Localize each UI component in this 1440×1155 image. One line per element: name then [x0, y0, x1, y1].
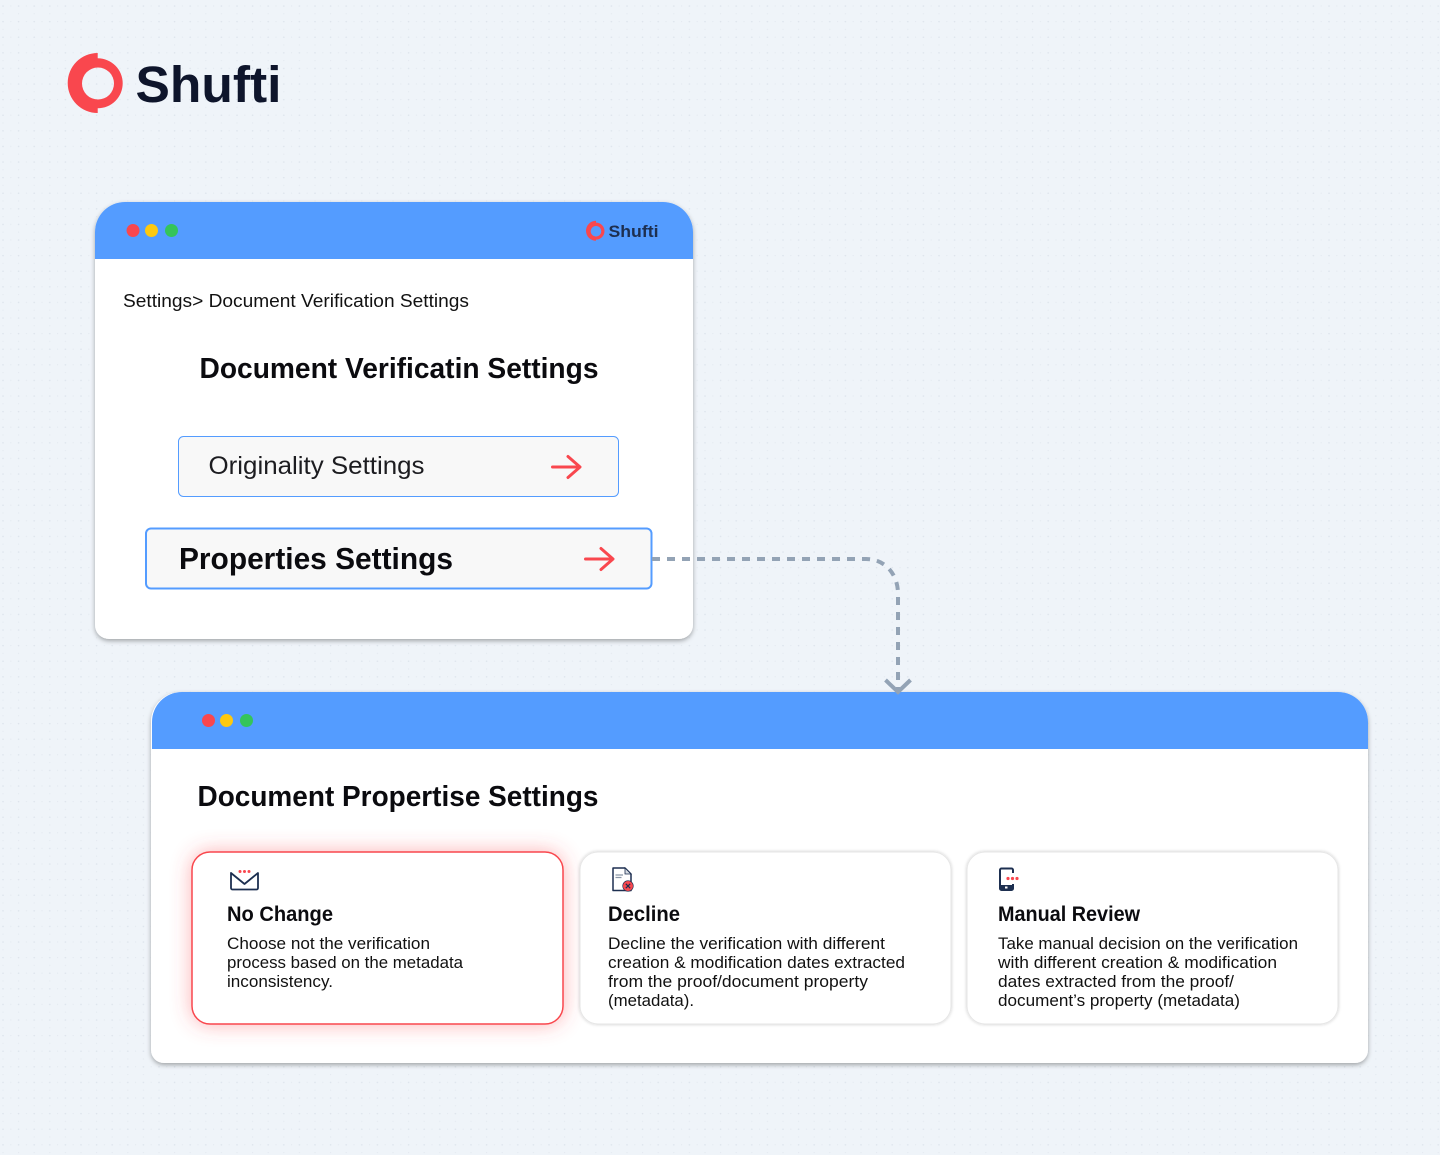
header logo: Shufti [608, 222, 658, 241]
card description [997, 935, 1298, 1010]
panel heading: Document Verificatin Settings [200, 353, 598, 385]
icon: mobile phone [1000, 868, 1019, 890]
panel header bar [95, 202, 693, 259]
card: no change [192, 852, 563, 1024]
card description: document’s property (metadata) [998, 992, 1240, 1010]
panel header bar [152, 692, 1368, 749]
panel body [95, 202, 693, 639]
card title: Decline [608, 903, 680, 926]
panel heading: Document Propertise Settings [198, 781, 598, 813]
arrow icon [552, 456, 580, 478]
card: decline [580, 852, 951, 1024]
card description: Choose not the verification [227, 935, 430, 953]
icon: Shufti ring [68, 53, 123, 113]
icon: envelope [231, 870, 258, 890]
card description: from the proof/document property [608, 973, 869, 991]
logo wordmark: Shufti [136, 56, 282, 113]
card description: Decline the verification with different [608, 935, 885, 953]
option: originality settings: Originality Settings [208, 452, 424, 480]
logo: Shufti [68, 53, 282, 113]
option: originality settings [178, 436, 618, 496]
card description [608, 935, 905, 1010]
card description: creation & modification dates extracted [608, 954, 905, 972]
card description: Take manual decision on the verification [998, 935, 1298, 953]
card: manual review [967, 852, 1338, 1024]
option: properties settings (highlighted) [146, 528, 652, 588]
card description: dates extracted from the proof/ [998, 973, 1234, 991]
card title: Manual Review [998, 903, 1141, 926]
arrow: dashed connector from properties settings to properties panel [652, 559, 910, 692]
card description: (metadata). [608, 992, 694, 1010]
card description [227, 935, 464, 991]
arrow icon [586, 548, 613, 570]
card description: process based on the metadata [227, 954, 464, 972]
panel body [151, 692, 1368, 1063]
panel: document properties settings [151, 692, 1368, 1063]
card description: inconsistency. [227, 973, 333, 991]
breadcrumb: Settings> Document Verification Settings [123, 291, 469, 311]
option: properties settings (highlighted): Properties Settings [179, 541, 453, 576]
card title: No Change [227, 903, 333, 926]
icon: rejected document [613, 868, 633, 891]
window control dots [126, 224, 178, 237]
header logo [586, 221, 658, 241]
window control dots [202, 714, 253, 727]
panel: document verification settings [95, 202, 693, 639]
card description: with different creation & modification [997, 954, 1277, 972]
